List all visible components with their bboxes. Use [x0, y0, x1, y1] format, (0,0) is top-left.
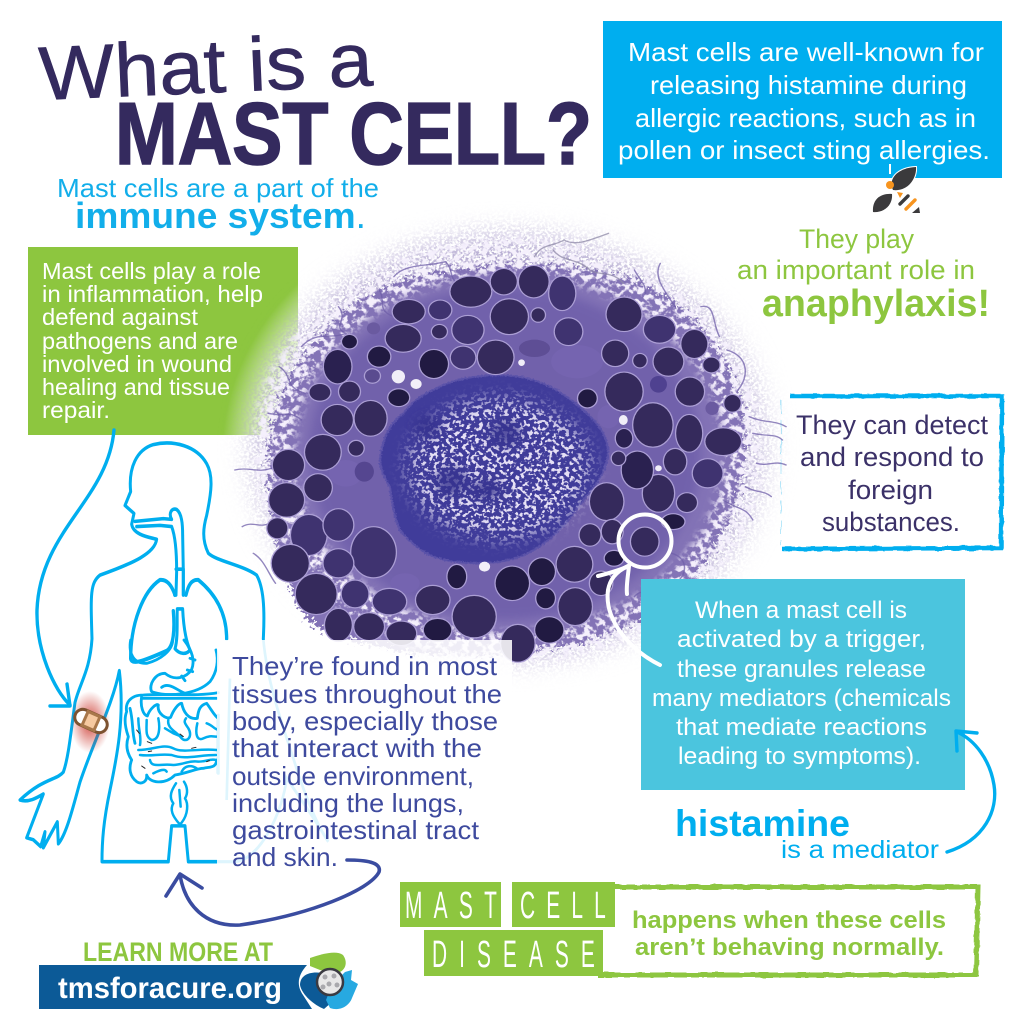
arrow: granule circle pointer: [598, 514, 672, 665]
nucleus body: [380, 375, 608, 563]
panel: green box text: Mast cells play a role: [42, 258, 261, 284]
arrow: histamine to mediators: [947, 731, 995, 852]
panel text: releasing histamine during: [650, 70, 967, 100]
subtitle: immune system: [57, 173, 379, 236]
dark mesentery marks: [137, 730, 209, 768]
panel text: activated by a trigger,: [677, 626, 926, 653]
panel text: foreign: [848, 475, 933, 505]
icon: human body outline: [20, 443, 264, 862]
white overlay panel: [217, 640, 512, 872]
icon: bandage with inflammation: [70, 691, 110, 753]
panel text: allergic reactions, such as in: [635, 103, 976, 133]
arrow: tissue text to body: [166, 860, 379, 925]
red inflammation glow: [70, 691, 110, 753]
panel: histamine info: [603, 21, 1002, 178]
nucleus: [380, 375, 608, 563]
cell cytoplasm: [268, 265, 746, 655]
brush frame: [781, 396, 1002, 549]
panel text: happens when these cells: [632, 907, 946, 934]
panel text: substances.: [822, 507, 960, 537]
callout: anaphylaxis: They play: [799, 224, 914, 254]
panel text: many mediators (chemicals: [652, 685, 951, 712]
trachea base: [175, 569, 190, 653]
lavender patches: [329, 322, 719, 593]
callout: anaphylaxis: [737, 224, 990, 325]
label: CELL: CELL: [520, 885, 606, 927]
cell outer grainy margin: [257, 237, 760, 657]
panel: green box text: defend against: [42, 304, 199, 330]
panel text: [618, 37, 990, 165]
mast cell micrograph illustration: [235, 233, 786, 663]
label: MAST: MAST: [405, 885, 497, 927]
label: DISEASE: DISEASE: [432, 934, 595, 976]
colon: [125, 693, 218, 783]
panel text: these granules release: [677, 656, 926, 683]
callout: histamine: is a mediator: [781, 836, 939, 864]
callout: anaphylaxis: an important role in: [737, 255, 975, 285]
panel: mast cell disease: [400, 882, 978, 976]
callout: anaphylaxis: anaphylaxis!: [762, 283, 990, 325]
pale blotches in outer cytoplasm: [253, 237, 764, 663]
panel: green box text: involved in wound: [42, 351, 232, 377]
brush frame: [598, 887, 978, 975]
text: tissue location: They’re found in most: [232, 651, 498, 681]
stomach: [130, 640, 217, 695]
text: tissue location: and skin.: [232, 842, 338, 872]
footer: learn more: [39, 937, 358, 1009]
faint right arm beneath overlay: [217, 639, 328, 862]
panel: green box text: healing and tissue: [42, 374, 230, 400]
text: tissue location: that interact with the: [232, 733, 482, 763]
text: tissue location: tissues throughout the: [232, 679, 502, 709]
icon: bee: [873, 164, 920, 213]
white halo behind cell photo: [222, 200, 802, 710]
panel text: pollen or insect sting allergies.: [618, 135, 990, 165]
callout: histamine: [675, 803, 939, 864]
text: tissue location: outside environment,: [232, 761, 474, 791]
airway: [135, 509, 183, 595]
panel: foreign substances: [781, 396, 1002, 549]
panel text: [796, 410, 988, 537]
panel text: [652, 597, 951, 770]
right lung: [186, 580, 227, 639]
panel text: [632, 907, 946, 961]
left lung: [131, 580, 175, 662]
subtitle: immune system: immune system.: [75, 195, 366, 236]
text: tissue location: [232, 651, 502, 872]
small intestine: [138, 718, 217, 773]
panel: mediators: [641, 579, 965, 790]
url banner: tmsforacure.org: [58, 972, 282, 1005]
chromatin speckle: [409, 398, 590, 538]
panel text: Mast cells are well-known for: [628, 37, 984, 67]
callout: histamine: histamine: [675, 803, 850, 844]
panel text: They can detect: [796, 410, 988, 440]
panel text: leading to symptoms).: [678, 743, 921, 770]
bright vacuoles: [392, 359, 662, 572]
title: What is a: [37, 17, 375, 117]
panel text: aren’t behaving normally.: [635, 934, 944, 961]
cell surface folds: [235, 233, 786, 597]
panel text: and respond to: [800, 442, 984, 472]
bandage: [72, 706, 110, 736]
text: tissue location: body, especially those: [232, 706, 498, 736]
body silhouette: [20, 443, 264, 862]
footer: learn more: LEARN MORE AT: [83, 937, 273, 967]
inner cytoplasm tone: [309, 287, 701, 620]
icon: stomach and intestines: [125, 640, 218, 824]
arrow: green box to arm: [37, 430, 114, 706]
text: tissue location: including the lungs,: [232, 788, 464, 818]
url banner: [39, 965, 312, 1009]
subtitle: immune system: Mast cells are a part of the: [57, 173, 379, 203]
icon: logo hands and cell: [300, 953, 358, 1009]
granules: [267, 266, 741, 662]
panel text: that mediate reactions: [676, 714, 927, 741]
panel: green inflammation box background: [28, 247, 298, 435]
text: tissue location: gastrointestinal tract: [232, 815, 480, 845]
rectum: [171, 782, 187, 824]
title: [37, 17, 592, 183]
panel: green box text: in inflammation, help: [42, 281, 263, 307]
panel: green box text: [42, 258, 263, 423]
panel: green box text: repair.: [42, 397, 110, 423]
darker chromatin patches: [414, 415, 522, 500]
panel text: When a mast cell is: [695, 597, 907, 624]
title: MAST CELL?: [115, 84, 592, 183]
panel: green box text: pathogens and are: [42, 328, 238, 354]
